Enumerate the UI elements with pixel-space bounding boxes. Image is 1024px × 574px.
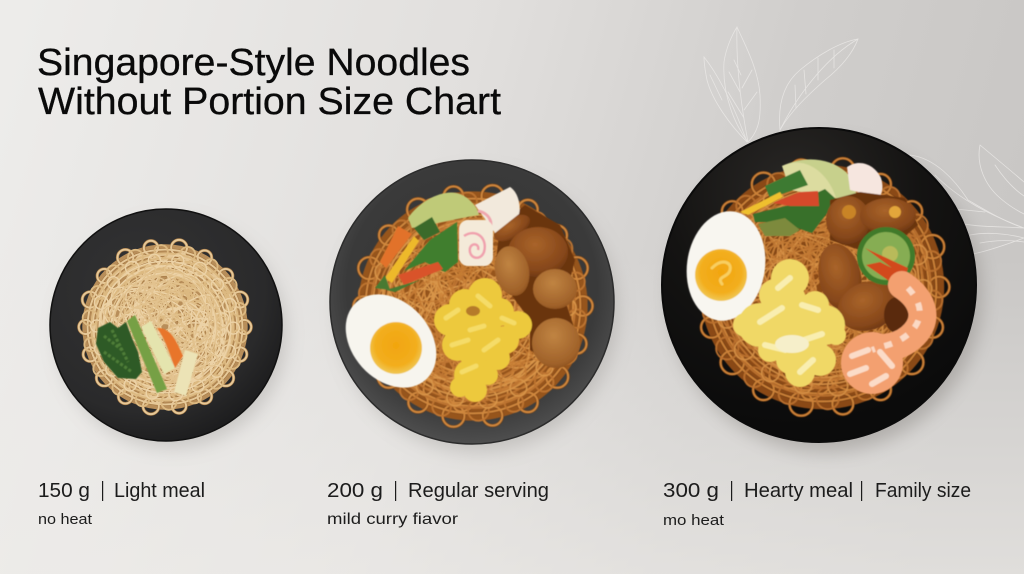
scrambled egg [733, 259, 846, 387]
portion label [38, 480, 205, 502]
plain noodles [49, 211, 281, 443]
shrimp [841, 248, 922, 394]
carrot strip [380, 226, 412, 268]
plate shadow [338, 172, 618, 452]
grey stone plate [330, 160, 614, 444]
red pepper [773, 191, 819, 206]
portion label: Hearty meal [744, 480, 853, 502]
pale stick [141, 321, 175, 374]
yellow pepper [385, 236, 419, 283]
decorative line-art leaves, top right [704, 27, 1024, 254]
carrot [157, 328, 183, 368]
green vegetables [753, 189, 837, 233]
large black plate [662, 128, 976, 442]
plate shadow [58, 220, 286, 448]
note: mo heat [663, 512, 725, 529]
toppings [680, 159, 922, 394]
curry noodles [650, 115, 994, 459]
panel: 300 g plate [650, 115, 994, 459]
herb [414, 217, 440, 240]
panel: 200 g plate [312, 145, 634, 467]
green stick [127, 315, 167, 393]
chicken pieces [490, 205, 580, 368]
white stick [174, 350, 198, 396]
chicken pieces [812, 239, 910, 339]
portion label: Family size [875, 480, 971, 502]
title [37, 42, 501, 123]
small black plate [50, 209, 282, 441]
lower green [375, 275, 420, 292]
parsley [96, 322, 142, 379]
fishcakes [459, 187, 520, 266]
title: Singapore-Style Noodles [37, 42, 470, 84]
lime slice [782, 159, 856, 198]
portion label: 200 g [327, 480, 383, 502]
curry noodles [312, 145, 634, 467]
red pepper [398, 262, 443, 285]
lime slice [408, 192, 479, 228]
fried shrimp [826, 192, 918, 250]
cucumber slice [857, 227, 915, 285]
toppings [327, 187, 580, 406]
plate shadow [670, 140, 982, 452]
vegetable garnish [96, 315, 198, 396]
portion label: 150 g [38, 480, 90, 502]
cooked pepper [758, 218, 800, 236]
boiled egg [680, 206, 772, 326]
caption: 150 g [38, 480, 205, 528]
portion label [663, 480, 971, 502]
caption: 300 g [663, 480, 971, 529]
portion label: Regular serving [408, 480, 549, 502]
portion label: Light meal [114, 480, 205, 502]
panel: 150 g plate [49, 209, 286, 448]
portion label: 300 g [663, 480, 719, 502]
green pepper [404, 222, 458, 272]
note: no heat [38, 511, 93, 528]
note: mild curry fiavor [327, 511, 459, 528]
portion label [327, 480, 549, 502]
boiled egg [327, 276, 455, 406]
fishcake [847, 163, 882, 197]
scrambled egg [434, 278, 532, 402]
title: Without Portion Size Chart [38, 81, 501, 123]
caption: 200 g [327, 480, 549, 528]
yellow pepper [740, 192, 783, 215]
